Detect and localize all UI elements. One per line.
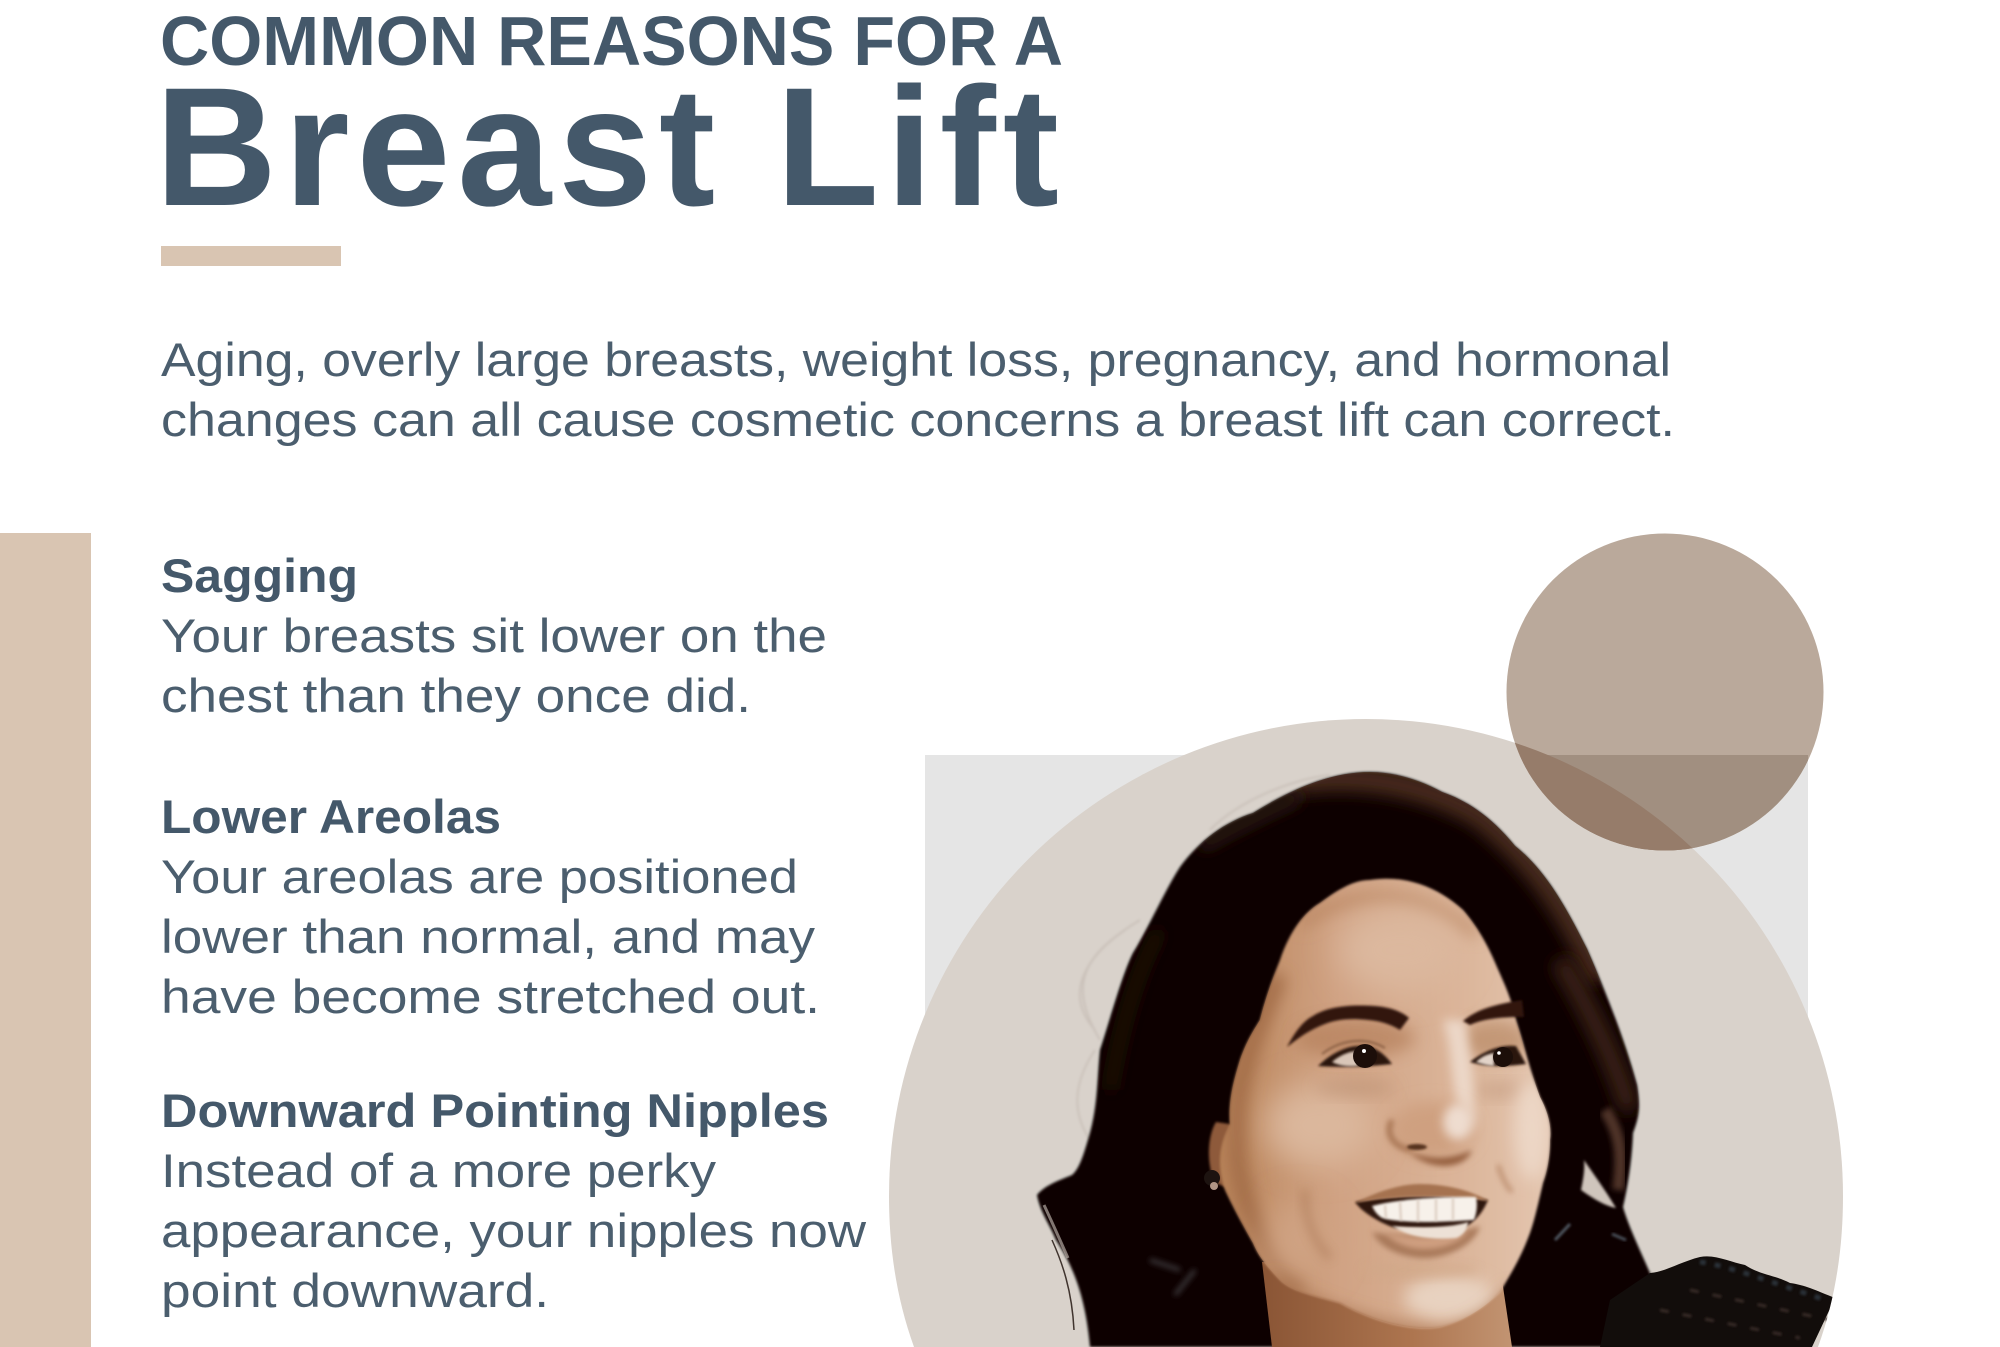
reason: downward pointing nipples: Downward Pointing Nipples xyxy=(161,1084,829,1137)
reason: lower areolas xyxy=(161,790,820,1023)
flyaway hairs xyxy=(1077,775,1330,1140)
ear xyxy=(1207,1120,1231,1188)
face xyxy=(1220,879,1550,1335)
left accent bar xyxy=(0,533,91,1347)
eyebrows xyxy=(1287,1000,1524,1047)
reason: downward pointing nipples: appearance, your nipples now xyxy=(161,1204,867,1257)
intro paragraph: Aging, overly large breasts, weight loss, pregnancy, and hormonal xyxy=(161,333,1671,386)
portrait photo circle xyxy=(880,710,1850,1347)
reason: sagging xyxy=(161,549,827,722)
title xyxy=(155,2,1063,241)
reason: downward pointing nipples: Instead of a more perky xyxy=(161,1144,717,1197)
earring xyxy=(1204,1170,1220,1190)
reason: sagging: Sagging xyxy=(161,549,358,602)
hair: gap of background in the curl xyxy=(1581,1160,1616,1208)
mouth xyxy=(1355,1184,1489,1258)
reason: lower areolas: Your areolas are positioned xyxy=(161,850,798,903)
reason: downward pointing nipples: point downward. xyxy=(161,1264,549,1317)
hair: blue sheen xyxy=(1555,1224,1570,1240)
sweater xyxy=(1600,1256,1835,1347)
reason: lower areolas: Lower Areolas xyxy=(161,790,501,843)
reason: sagging: chest than they once did. xyxy=(161,669,751,722)
hair xyxy=(1037,772,1700,1347)
reason: lower areolas: lower than normal, and may xyxy=(161,910,816,963)
intro paragraph xyxy=(161,333,1675,446)
reason: sagging: Your breasts sit lower on the xyxy=(161,609,827,662)
neck xyxy=(1262,1262,1512,1347)
title line: breast lift: Breast Lift xyxy=(155,52,1059,241)
photo background xyxy=(880,710,1850,1347)
intro paragraph: changes can all cause cosmetic concerns a breast lift can correct. xyxy=(161,393,1675,446)
hair: brown highlights on crown xyxy=(1290,778,1600,980)
title line: common reasons: COMMON REASONS FOR A xyxy=(160,2,1063,80)
grey backing square xyxy=(925,755,1808,1347)
hair: left curl strands xyxy=(1044,1205,1068,1258)
left eye xyxy=(1318,1041,1392,1068)
right eye xyxy=(1470,1046,1526,1067)
small translucent taupe circle xyxy=(1506,534,1824,850)
face shading xyxy=(1237,975,1300,1290)
title underline xyxy=(161,246,341,266)
reason: downward pointing nipples xyxy=(161,1084,867,1317)
reason: lower areolas: have become stretched out. xyxy=(161,970,820,1023)
